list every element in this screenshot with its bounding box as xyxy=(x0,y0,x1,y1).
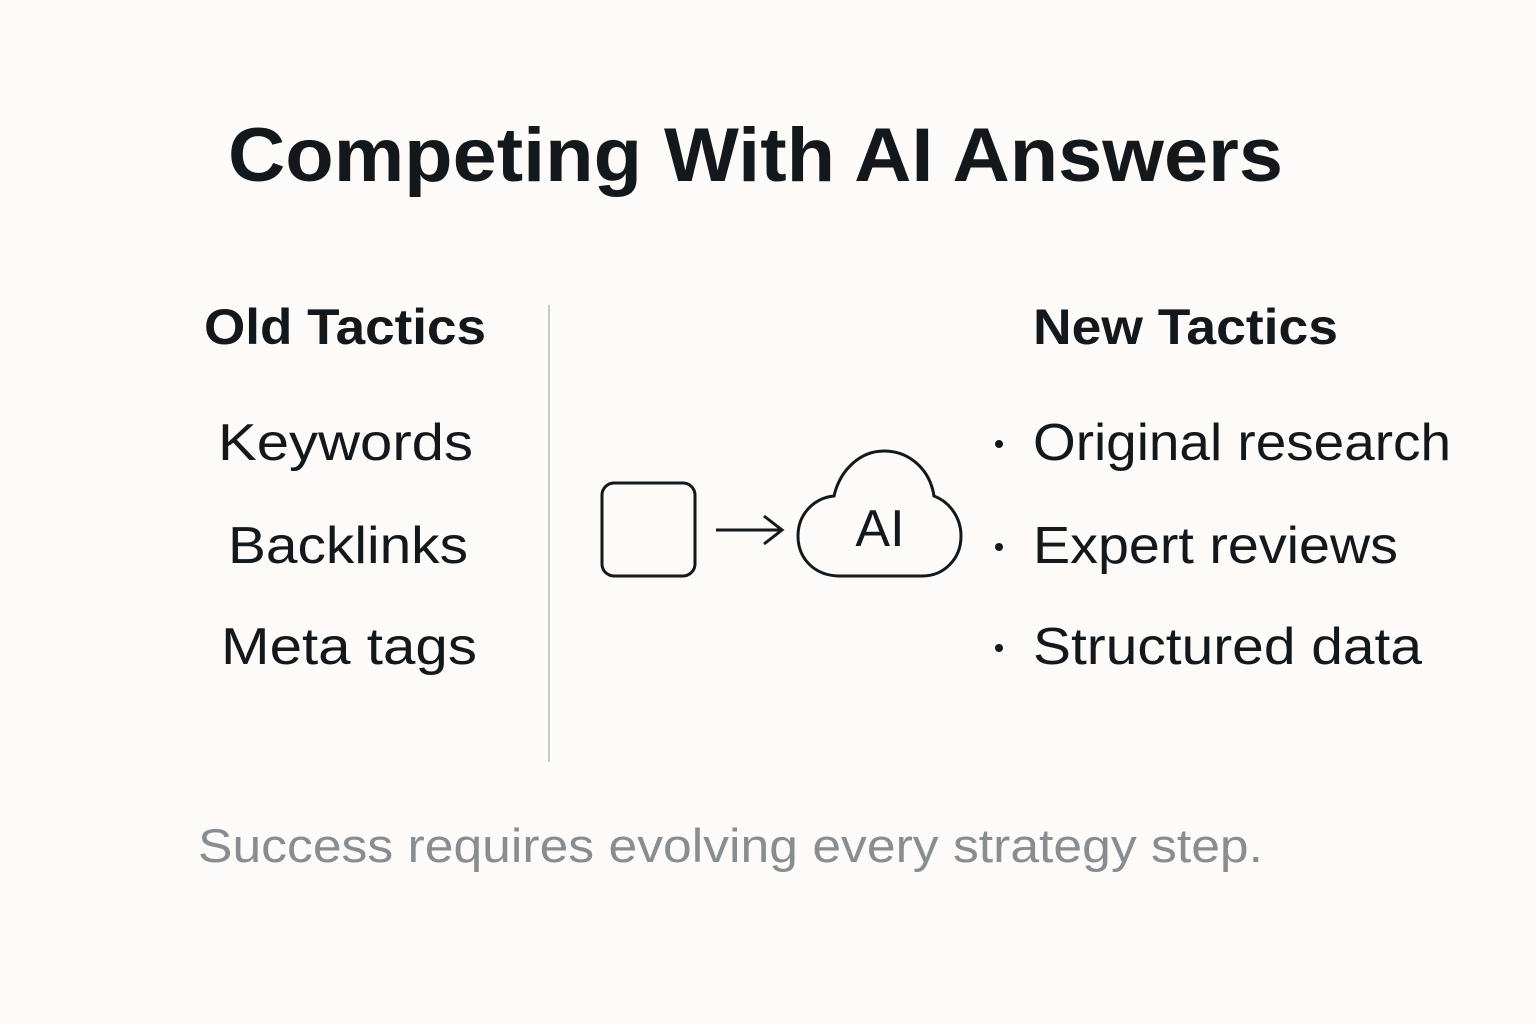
cloud label: AI xyxy=(855,500,905,558)
heading: old tactics: Old Tactics xyxy=(204,299,486,355)
list: old tactics items: Backlinks xyxy=(228,517,468,575)
footer text: Success requires evolving every strategy step. xyxy=(198,819,1263,872)
list: new tactics items xyxy=(995,414,1451,676)
list: old tactics items: Meta tags xyxy=(221,618,477,676)
icon: square to AI cloud xyxy=(602,451,961,576)
arrow xyxy=(716,516,782,544)
icon: cloud xyxy=(798,451,961,576)
list: old tactics items: Keywords xyxy=(218,414,473,472)
panel: old tactics xyxy=(204,299,486,676)
icon: square xyxy=(602,483,695,576)
list: new tactics items: Expert reviews xyxy=(1033,517,1398,575)
list: old tactics items xyxy=(218,414,477,676)
list: new tactics items: Structured data xyxy=(1033,618,1422,676)
list: new tactics items: Original research xyxy=(1033,414,1451,472)
panel: new tactics xyxy=(995,299,1451,676)
heading: new tactics: New Tactics xyxy=(1033,299,1338,355)
title: Competing With AI Answers xyxy=(228,113,1283,198)
